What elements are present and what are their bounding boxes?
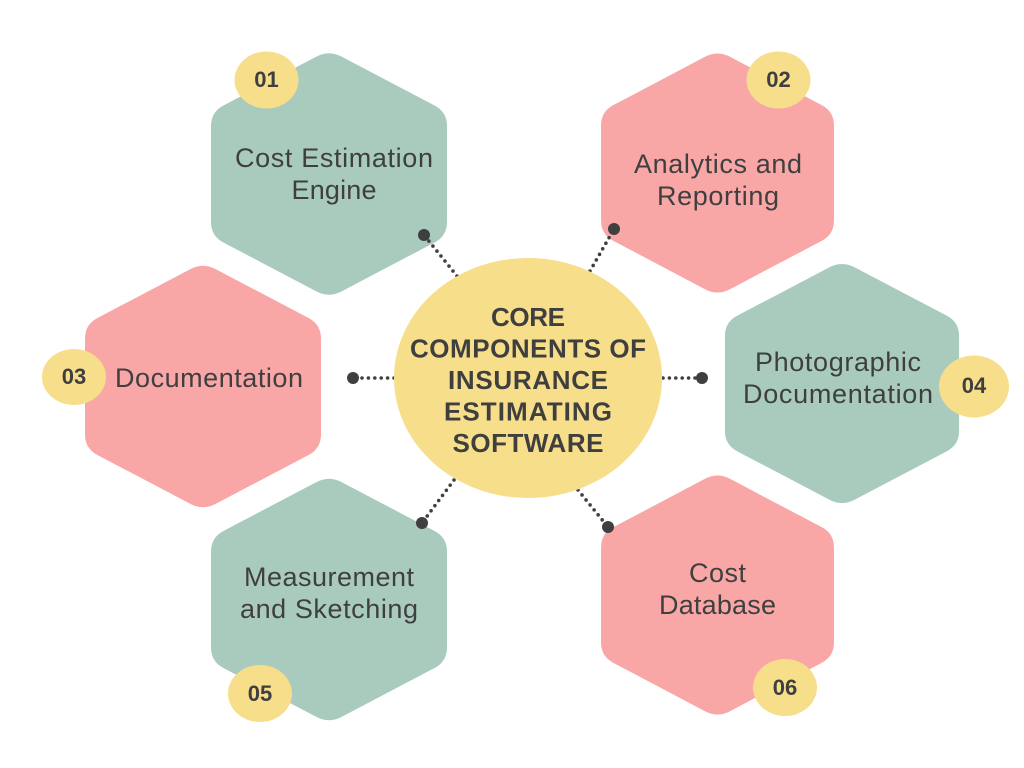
badge 04: 04 <box>962 373 987 398</box>
badge 05: 05 <box>248 681 272 706</box>
title: ESTIMATING <box>444 396 612 426</box>
panel: 01 Cost Estimation Engine <box>211 52 447 295</box>
label: Measurement and Sketching: and Sketching <box>240 594 418 624</box>
connector: centre to 05 <box>416 480 454 529</box>
label: Cost Estimation Engine: Engine <box>292 175 376 205</box>
connector: centre to 03 <box>347 372 394 384</box>
badge 06: 06 <box>773 675 797 700</box>
hexagon 05 <box>211 479 447 720</box>
label: Analytics and Reporting: Analytics and <box>634 149 802 179</box>
label: Photographic Documentation: Documentation <box>743 379 933 409</box>
label: Documentation: Documentation <box>115 363 303 393</box>
hexagon 03 <box>85 266 321 507</box>
title: INSURANCE <box>448 365 608 395</box>
label: Measurement and Sketching: Measurement <box>244 562 414 592</box>
label: Cost Estimation Engine: Cost Estimation <box>235 143 433 173</box>
connector: centre to 01 <box>418 229 457 276</box>
badge 03: 03 <box>62 364 86 389</box>
title: COMPONENTS OF <box>410 334 646 364</box>
badge 01: 01 <box>254 67 279 92</box>
badge 01 <box>234 52 298 108</box>
badge 02: 02 <box>766 67 791 92</box>
hexagon 01 <box>211 53 447 295</box>
connector: centre to 04 <box>663 372 708 384</box>
hexagon 02 <box>601 53 834 293</box>
panel: 06 Cost Database <box>601 475 834 716</box>
panel: 02 Analytics and Reporting <box>601 52 834 293</box>
hexagon 04 <box>725 264 959 503</box>
central ellipse <box>394 258 662 498</box>
central circle and title <box>394 258 662 498</box>
panel: 04 Photographic Documentation <box>725 264 1009 503</box>
label: Photographic Documentation: Photographic <box>755 347 921 377</box>
badge 05 <box>228 665 292 722</box>
title: SOFTWARE <box>452 428 604 458</box>
panel: 05 Measurement and Sketching <box>211 479 447 722</box>
badge 06 <box>753 659 817 716</box>
badge 02 <box>746 52 810 108</box>
title: CORE <box>491 302 565 332</box>
label: Cost Database: Database <box>659 590 776 620</box>
badge 03 <box>42 349 106 405</box>
connector: centre to 06 <box>578 490 614 533</box>
panel: 03 Documentation <box>42 266 321 507</box>
hexagon 06 <box>601 475 834 715</box>
connector: centre to 02 <box>590 223 620 271</box>
label: Analytics and Reporting: Reporting <box>657 181 779 211</box>
badge 04 <box>939 356 1009 418</box>
label: Cost Database: Cost <box>689 558 746 588</box>
